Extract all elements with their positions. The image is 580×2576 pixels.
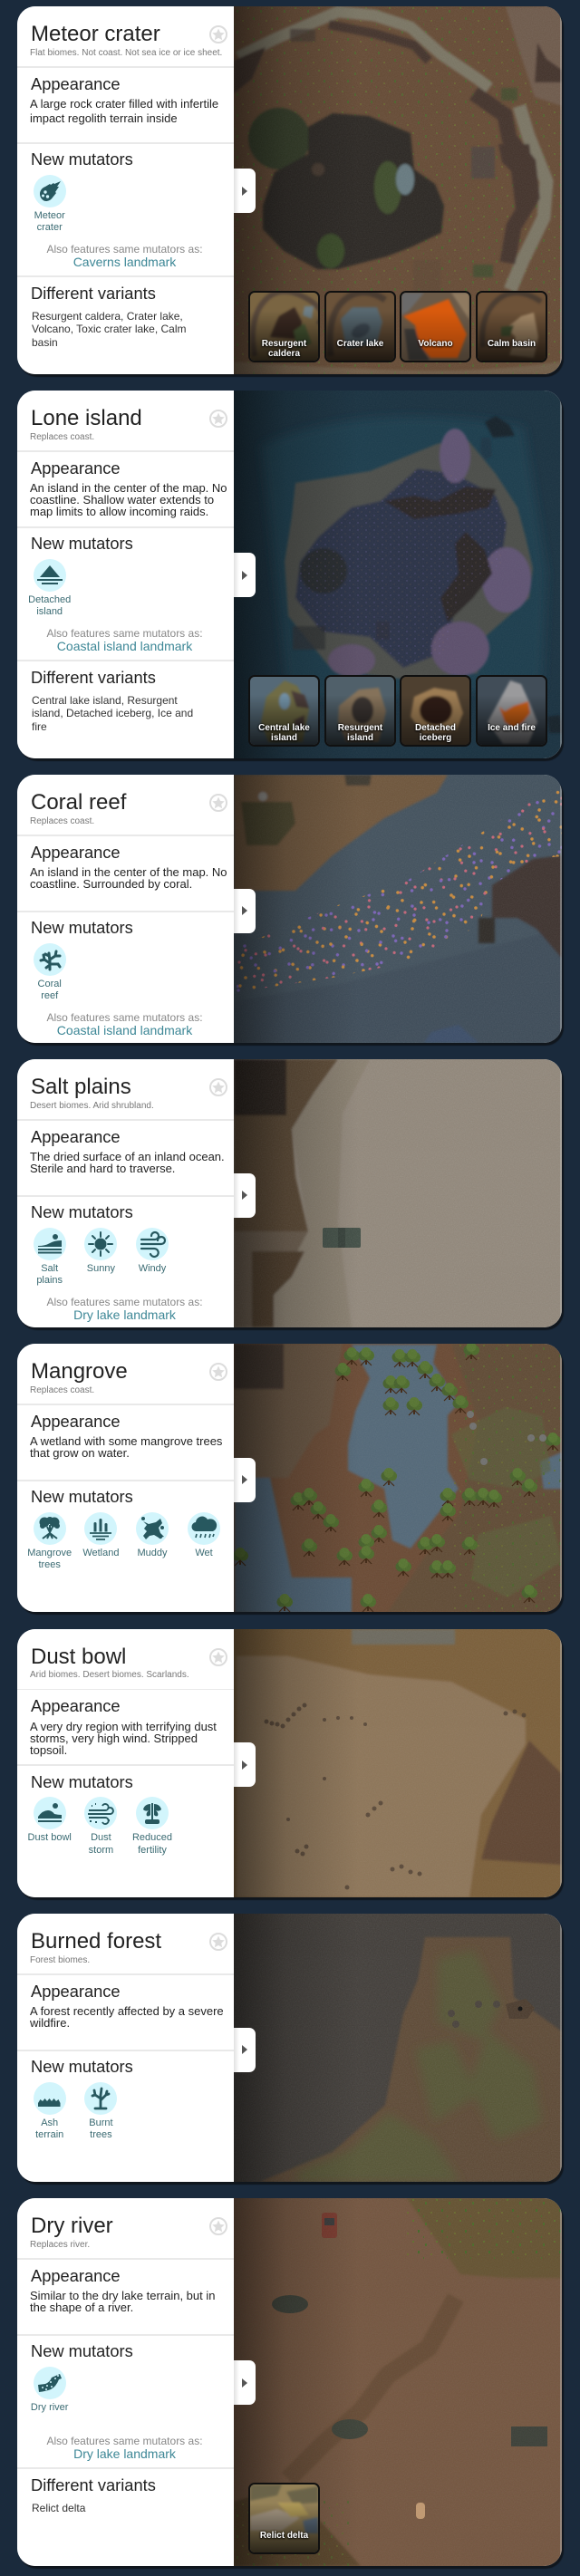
text: appearance: A large rock crater filled with infertile [30,97,218,111]
thumbnail: calm basin [476,291,547,362]
text: appearance: Sterile and hard to traverse. [30,1162,175,1175]
heading: new mutators: New mutators [31,2057,133,2076]
icon: star [209,25,227,43]
map: dry river [234,2198,562,2566]
mutator: muddy [136,1512,169,1558]
icon: star [209,1363,227,1381]
label [34,210,65,233]
text panel [17,1629,234,1897]
icon: ash terrain [34,2082,66,2115]
text: also features: Also features same mutators as: [46,1011,203,1024]
panel: dust bowl [17,1629,562,1897]
mutator: mangrove trees [27,1512,72,1570]
text: also features: Also features same mutators as: [46,2434,203,2446]
heading: appearance: Appearance [31,1127,121,1146]
map: coral reef [234,775,562,1043]
text: appearance: the shape of a river. [30,2301,133,2314]
heading: appearance: Appearance [31,458,121,478]
label: plains [36,1275,63,1286]
subtitle: Replaces river. [30,2240,90,2250]
heading: appearance: Appearance [31,1696,121,1715]
label [70,1832,131,1857]
mutator: wetland [82,1512,119,1558]
mutator: wet [179,1512,229,1567]
button: arrow [234,2360,256,2405]
heading: different variants: Different variants [31,668,156,687]
label: Wet [195,1548,213,1558]
label: storm [89,1845,113,1856]
thumbnail: central lake island: Central lake [258,723,310,732]
mutator: salt plains [34,1228,66,1286]
icon: meteor [34,175,66,207]
text: appearance [30,1434,222,1460]
map: lone island [234,391,562,758]
text: appearance: topsoil. [30,1743,67,1757]
text: also features: Also features same mutators as: [46,627,203,640]
title: Dry river [31,2214,113,2238]
thumbnail: volcano: Volcano [418,339,453,348]
icon: mud splat [136,1512,169,1545]
text: variants: fire [32,720,47,733]
heading: new mutators: New mutators [31,918,133,937]
thumbnail: central lake island: island [271,733,297,743]
thumbnail: resurgent island [324,675,396,747]
map: dust bowl [234,1629,562,1897]
text panel [17,1344,234,1612]
mutator: meteor crater [34,175,66,233]
label: terrain [35,2129,63,2140]
label: Windy [139,1263,166,1274]
heading: appearance: Appearance [31,1412,121,1431]
text: appearance [30,2005,224,2029]
icon: dust storm [84,1797,117,1829]
mutator: dust bowl [24,1797,75,1851]
heading: appearance: Appearance [31,74,121,93]
label: Dry river [31,2402,68,2413]
title: Coral reef [31,790,126,815]
button: arrow [234,1457,256,1502]
thumbnail: resurgent island: Resurgent [338,723,382,732]
thumbnail: ice and fire [476,675,547,747]
text: variants: basin [32,336,58,349]
mutator: sunny [84,1228,117,1274]
text: appearance: A very dry region with terrifying dust [30,1720,217,1733]
mutator: coral reef [34,943,66,1001]
label: fertility [138,1845,167,1856]
panel: lone island [17,391,562,758]
heading: new mutators: New mutators [31,1202,133,1221]
subtitle: Flat biomes. Not coast. Not sea ice or ice sheet. [30,48,222,58]
subtitle: Replaces coast. [30,816,94,826]
link: landmark: Coastal island landmark [57,639,192,653]
panel: salt plains [17,1059,562,1327]
title: Dust bowl [31,1644,126,1669]
panel: coral reef [17,775,562,1043]
label: Mangrove [27,1548,72,1558]
icon: star [209,1647,227,1665]
thumbnail: relict delta [248,2483,320,2554]
label: Salt [41,1263,58,1274]
label: Reduced [132,1832,172,1843]
label: Meteor [34,210,65,221]
text: appearance: Similar to the dry lake terrain, but in [30,2289,215,2302]
icon: star [209,2217,227,2235]
link: landmark: Caverns landmark [73,255,176,269]
text: appearance: A forest recently affected by a severe [30,2004,224,2018]
button: arrow [234,553,256,597]
heading: new mutators: New mutators [31,1772,133,1791]
label: Muddy [137,1548,168,1558]
map: mangrove [234,1344,562,1612]
label: trees [38,1559,61,1570]
title: Lone island [31,406,142,430]
label: crater [37,222,63,233]
text: appearance [30,865,227,891]
label: trees [90,2129,112,2140]
icon: coral [34,943,66,976]
button: arrow [234,2028,256,2071]
text: appearance [30,2290,215,2313]
thumbnail: crater lake [324,291,396,362]
text: appearance: An island in the center of the map. No [30,865,227,879]
text: appearance [30,481,227,518]
icon: wetland [84,1512,117,1545]
text: appearance: coastline. Surrounded by coral. [30,877,192,891]
button: arrow [234,169,256,213]
label [36,1263,63,1286]
mutator: dry river [24,2367,75,2421]
text panel [17,1914,234,2182]
text panel [17,6,234,374]
icon: star [209,1933,227,1951]
thumbnail: ice and fire: Ice and fire [488,723,536,732]
text: appearance [30,97,218,125]
thumbnail: resurgent island: island [347,733,373,743]
thumbnail: detached iceberg: Detached [415,723,456,732]
icon: reduced fertility [136,1797,169,1829]
label: Burnt [89,2118,113,2128]
subtitle: Forest biomes. [30,1955,90,1965]
label: Wetland [82,1548,119,1558]
thumbnail: detached iceberg [400,675,471,747]
text panel [17,1059,234,1327]
label [19,2118,81,2141]
button: arrow [234,888,256,933]
label [121,1832,183,1857]
label: Dust bowl [28,1832,72,1843]
map: salt plains [234,1059,562,1327]
title: Burned forest [31,1929,161,1954]
thumbnail: calm basin: Calm basin [488,339,536,348]
text: variants [32,694,193,733]
panel: meteor crater [17,6,562,374]
text: appearance: impact regolith terrain inside [30,111,178,125]
text: appearance: The dried surface of an inland ocean. [30,1150,225,1163]
map: meteor crater [234,6,562,374]
label [38,979,62,1001]
map: burned forest [234,1914,562,2182]
icon: rain cloud [188,1512,220,1545]
mutator: windy [136,1228,169,1274]
subtitle: Arid biomes. Desert biomes. Scarlands. [30,1670,189,1680]
thumbnail: relict delta: Relict delta [260,2530,308,2541]
icon: mangrove tree [34,1512,66,1545]
icon: dust bowl [34,1797,66,1829]
text panel [17,775,234,1043]
text: appearance: storms, very high wind. Stripped [30,1732,198,1745]
thumbnail: resurgent caldera: Resurgent [262,339,306,348]
label [70,2118,131,2141]
text: variants [32,310,187,349]
title: Salt plains [31,1075,131,1099]
panel: burned forest [17,1914,562,2182]
heading: appearance: Appearance [31,1982,121,2001]
text panel [17,2198,234,2566]
thumbnail: crater lake: Crater lake [337,339,383,348]
text: also features: Also features same mutators as: [46,243,203,256]
heading: appearance: Appearance [31,843,121,862]
title: Meteor crater [31,22,160,46]
heading: appearance: Appearance [31,2266,121,2285]
text: variants: Central lake island, Resurgent [32,694,178,707]
label: Coral [38,979,62,989]
text: variants: Resurgent caldera, Crater lake, [32,310,183,323]
thumbnail: resurgent caldera: caldera [268,349,300,359]
button: arrow [234,1742,256,1787]
icon: star [209,794,227,812]
subtitle: Desert biomes. Arid shrubland. [30,1101,154,1111]
link: landmark: Dry lake landmark [73,1307,176,1322]
label: reef [41,990,58,1001]
label: Sunny [87,1263,115,1274]
label: Ash [41,2118,58,2128]
subtitle: Replaces coast. [30,1385,94,1395]
heading: different variants: Different variants [31,2475,156,2494]
text: variants: island, Detached iceberg, Ice and [32,707,193,719]
text: appearance [30,1721,217,1756]
mutator: burnt trees [75,2082,126,2137]
panel: dry river [17,2198,562,2566]
link: landmark: Dry lake landmark [73,2446,176,2461]
label: Dust [91,1832,111,1843]
label [27,1548,72,1570]
label: Detached [28,594,71,605]
mutator: ash terrain [24,2082,75,2137]
text: appearance: that grow on water. [30,1446,130,1460]
title: Mangrove [31,1359,128,1384]
mutator: reduced fertility [127,1797,178,1851]
button: arrow [234,1172,256,1218]
heading: different variants: Different variants [31,284,156,303]
text: appearance: An island in the center of the map. No [30,481,227,495]
text: variants: Relict delta [32,2502,85,2514]
text: appearance: coastline. Shallow water extends to [30,493,214,507]
heading: new mutators: New mutators [31,534,133,553]
thumbnail: resurgent caldera [248,291,320,362]
text: appearance: wildfire. [30,2016,70,2030]
thumbnail: central lake island [248,675,320,747]
text panel [17,391,234,758]
thumbnail: detached iceberg: iceberg [420,733,451,743]
heading: new mutators: New mutators [31,1487,133,1506]
icon: burnt tree [84,2082,117,2115]
text: also features: Also features same mutators as: [46,1296,203,1308]
text: variants: Volcano, Toxic crater lake, Calm [32,323,187,335]
icon: sun [84,1228,117,1260]
mutator: dust storm [75,1797,126,1851]
icon: wind [136,1228,169,1260]
text: appearance [30,1150,225,1175]
subtitle: Replaces coast. [30,432,94,442]
icon: star [209,1078,227,1096]
text: appearance: map limits to allow incoming raids. [30,505,208,518]
icon: star [209,410,227,428]
icon: dry river [34,2367,66,2399]
text: appearance: A wetland with some mangrove trees [30,1434,222,1448]
label [28,594,71,617]
icon: salt plains [34,1228,66,1260]
icon: island [34,559,66,592]
thumbnail: volcano [400,291,471,362]
link: landmark: Coastal island landmark [57,1023,192,1037]
label: island [36,606,63,617]
panel: mangrove [17,1344,562,1612]
heading: new mutators: New mutators [31,2341,133,2360]
mutator: detached island [28,559,71,617]
heading: new mutators: New mutators [31,150,133,169]
